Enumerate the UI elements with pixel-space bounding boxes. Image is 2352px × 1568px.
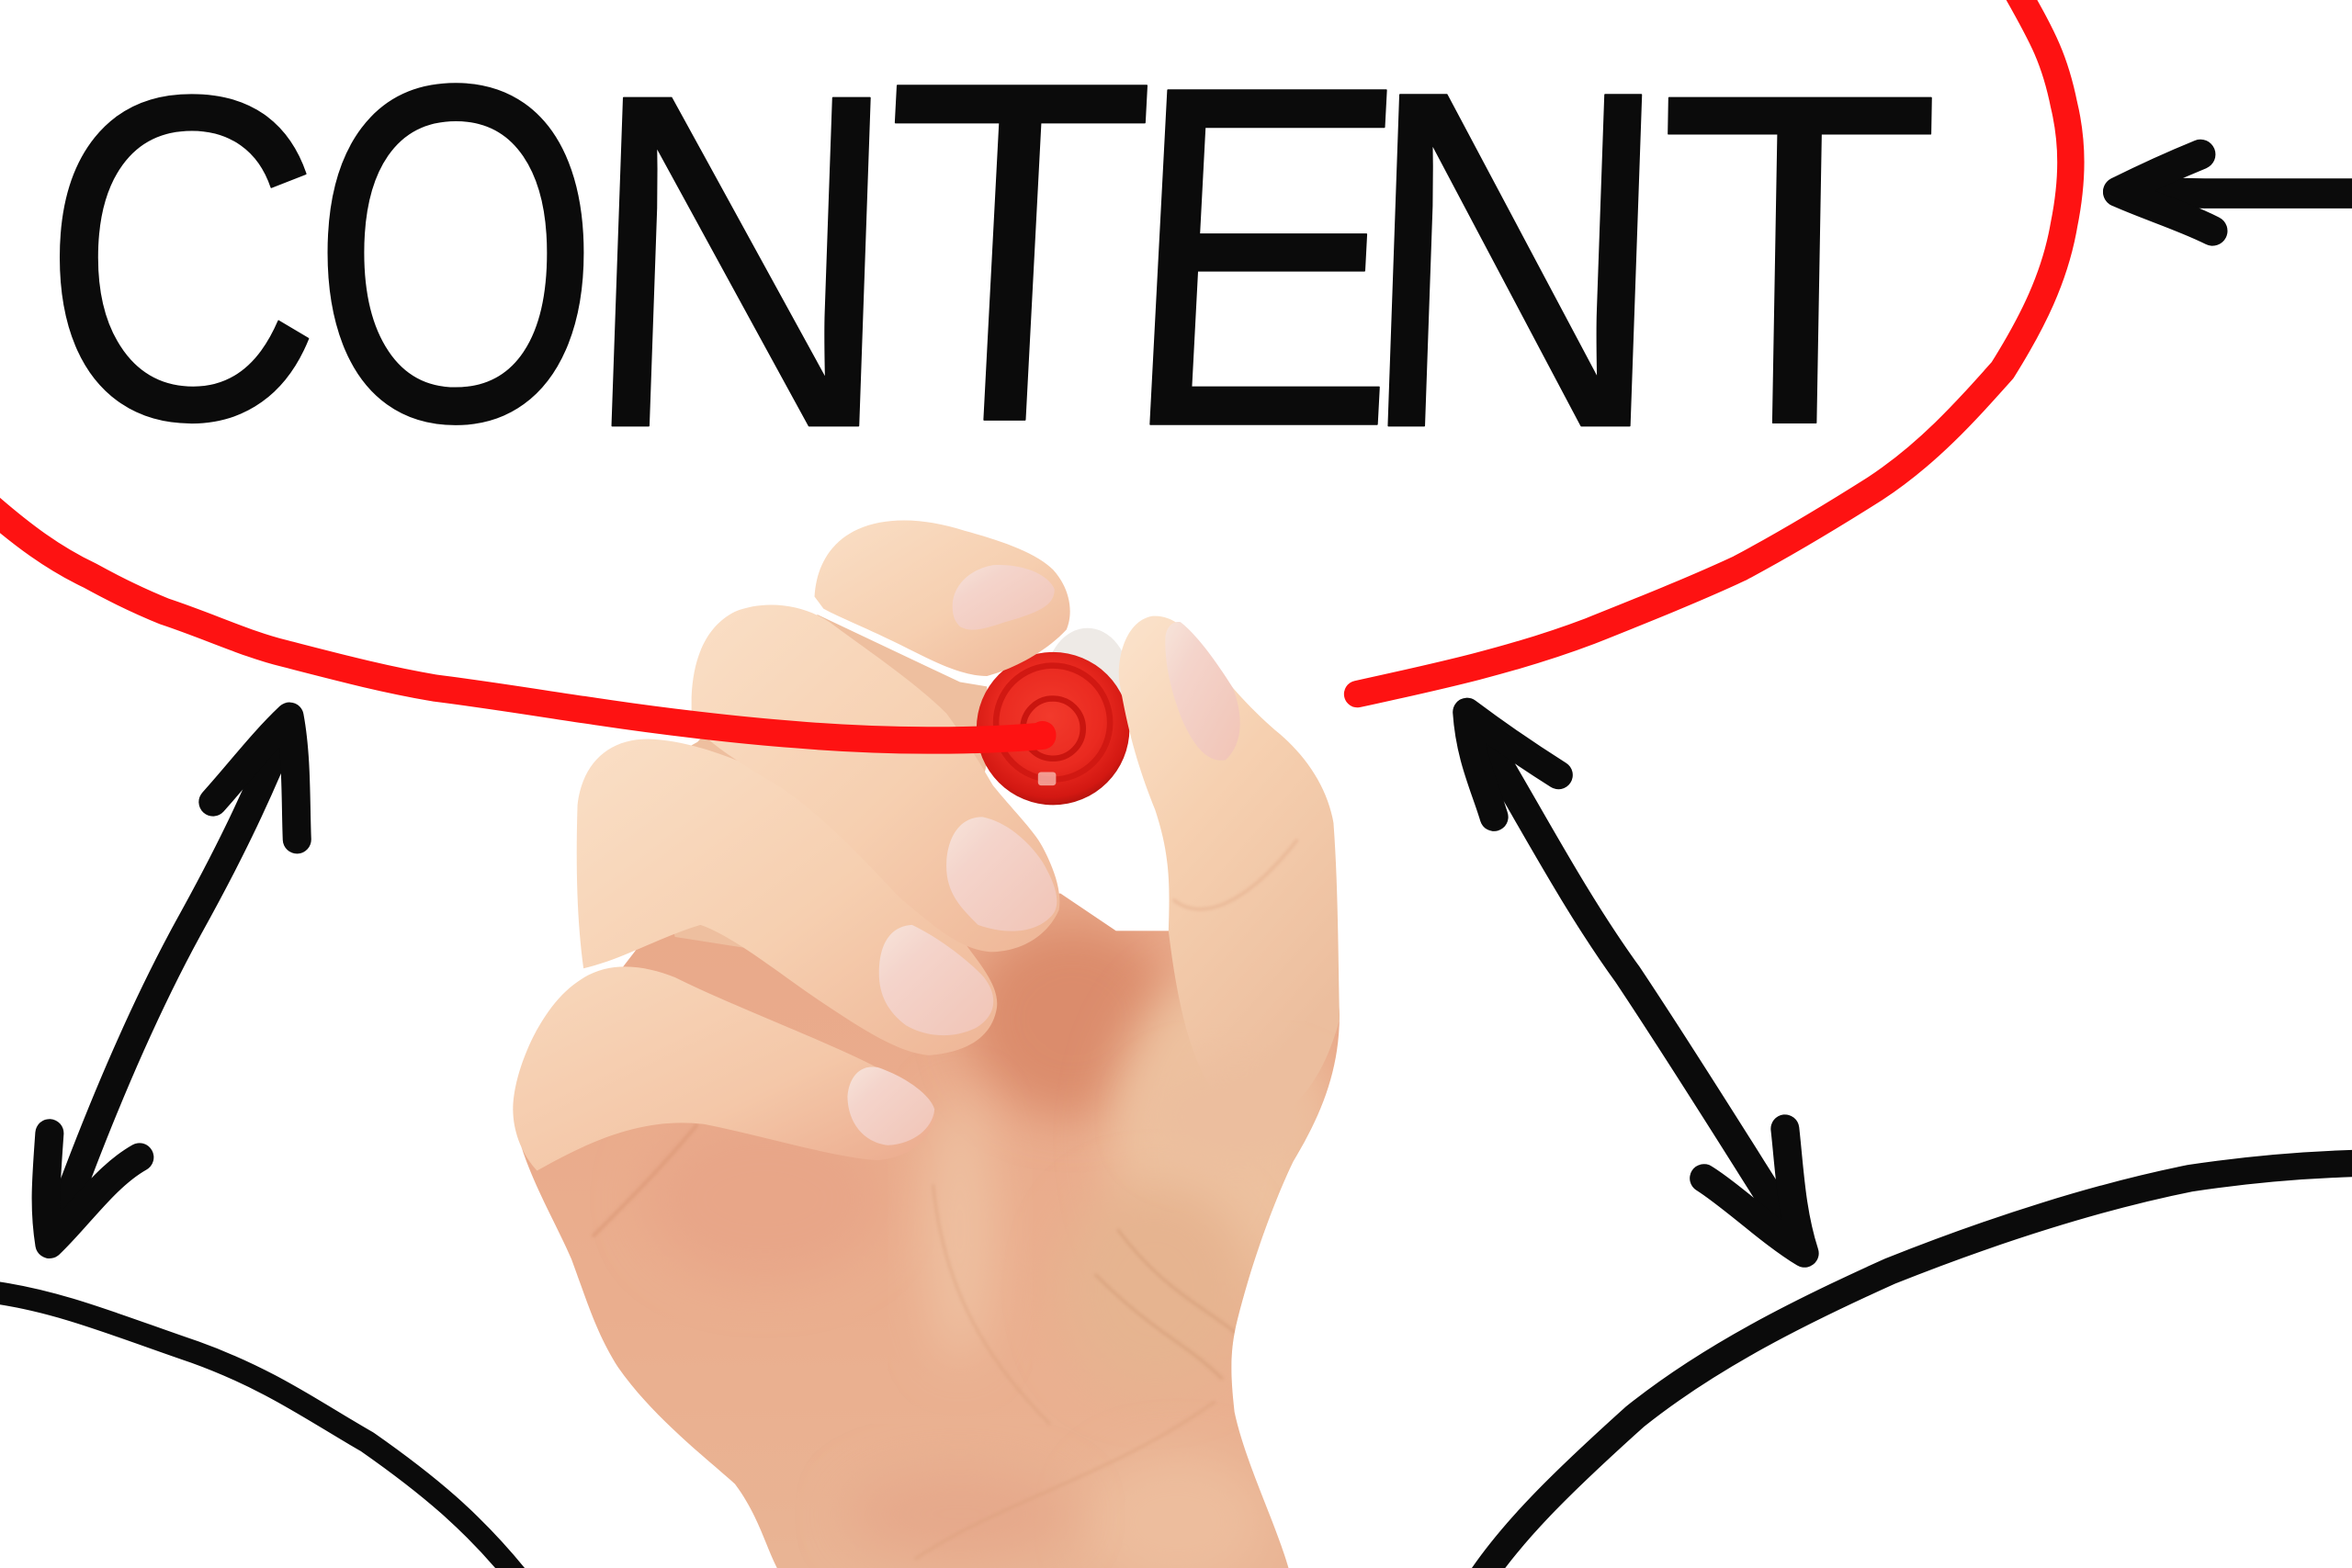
marker tip (977, 652, 1129, 805)
bubble outline: bottom right (1482, 1163, 2352, 1568)
title: CONTENT: N (1350, 0, 1680, 528)
title: CONTENT (40, 0, 1943, 528)
palm and wrist (513, 894, 1340, 1568)
title: CONTENT: O (311, 0, 601, 523)
hand holding marker (513, 520, 1340, 1568)
ring finger (513, 966, 935, 1171)
title: CONTENT: T (1651, 0, 1943, 523)
red outline: left arc ending at marker (0, 505, 1043, 740)
title: CONTENT: E (1111, 0, 1419, 527)
bubble outline: bottom left (0, 1292, 517, 1568)
arrow: top right, pointing to content (2118, 154, 2352, 231)
title: CONTENT: N (572, 0, 910, 526)
thumb (1119, 615, 1340, 1084)
middle finger (577, 739, 997, 1055)
marker cap behind (1046, 628, 1129, 736)
top finger (815, 520, 1070, 676)
arrow: right double-headed (1467, 712, 1804, 1253)
title: CONTENT: C (40, 0, 323, 516)
red outline: right arc (1358, 0, 2071, 694)
arrow: left double-headed (46, 716, 297, 1245)
index finger (692, 605, 1059, 952)
shadowed skin behind fingers (630, 615, 990, 975)
